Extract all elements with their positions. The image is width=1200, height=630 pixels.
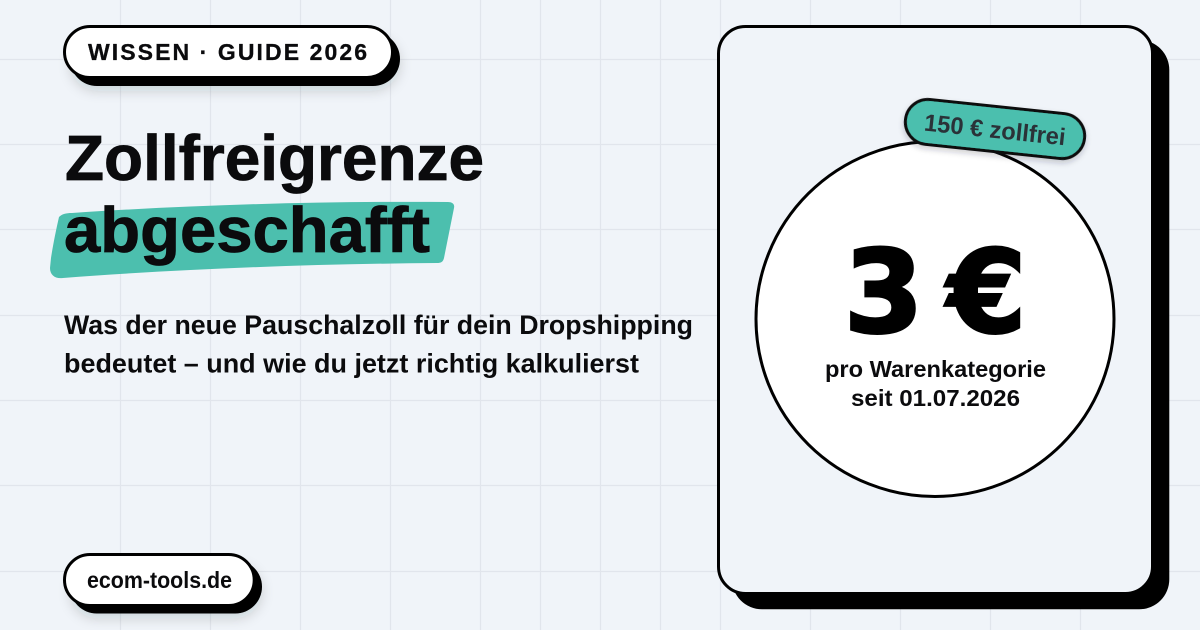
price value: 3 €: € bbox=[944, 226, 1026, 359]
price value: 3 €: 3 bbox=[844, 226, 923, 359]
badge: category tag: WISSEN · GUIDE 2026 bbox=[88, 39, 367, 65]
footer pill: ecom-tools.de: ecom-tools.de bbox=[87, 567, 232, 593]
subtitle text bbox=[64, 310, 693, 378]
circle: price bbox=[756, 142, 1114, 496]
tag: 150 € zollfrei: 150 € zollfrei bbox=[923, 110, 1067, 151]
badge: category tag bbox=[64, 26, 400, 86]
subtitle text: Was der neue Pauschalzoll für dein Dropshipping bbox=[64, 310, 693, 340]
heading highlight: abgeschafft: abgeschafft bbox=[64, 194, 430, 266]
caption: category and date bbox=[825, 356, 1046, 411]
subtitle text: bedeutet – und wie du jetzt richtig kalkulierst bbox=[64, 348, 639, 378]
caption: category and date: pro Warenkategorie bbox=[825, 356, 1046, 382]
caption: category and date: seit 01.07.2026 bbox=[851, 385, 1020, 411]
footer pill: ecom-tools.de bbox=[64, 554, 262, 614]
panel: price card bbox=[718, 26, 1169, 609]
tag: 150 € zollfrei bbox=[903, 97, 1087, 161]
price value: 3 € bbox=[844, 226, 1026, 359]
title: Zollfreigrenze: Zollfreigrenze bbox=[65, 122, 484, 194]
